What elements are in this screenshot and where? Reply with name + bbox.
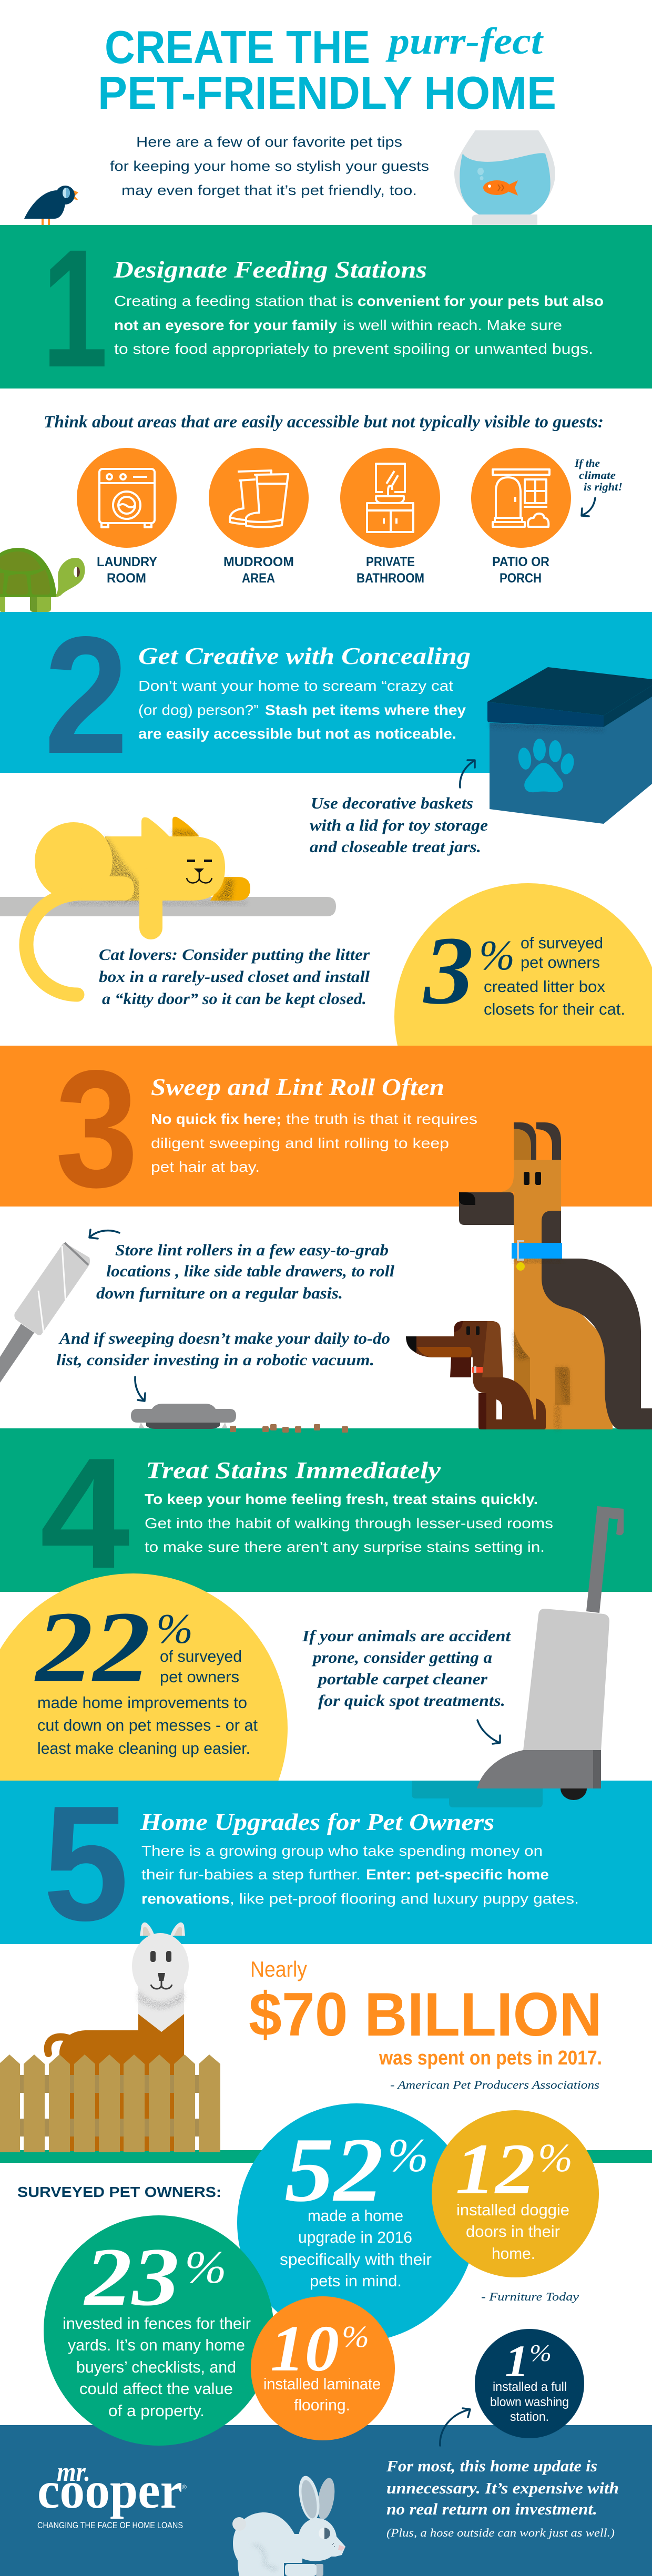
- stat circle: 23 percent: buyers’ checklists, and: [76, 2358, 236, 2376]
- stat circle: 52 percent: specifically with their: [280, 2250, 432, 2268]
- stat circle: 22 percent: least make cleaning up easier.: [37, 1739, 250, 1757]
- stat circle: 22 percent: pet owners: [160, 1668, 239, 1686]
- tip: carpet cleaner: prone, consider getting a: [311, 1648, 492, 1667]
- dog collar: [512, 1243, 562, 1259]
- arrow: to lint roller: [89, 1230, 119, 1239]
- stat circle: 1 percent: installed a full: [493, 2380, 567, 2394]
- source: furniture today: - Furniture Today: [481, 2290, 579, 2303]
- stat circle: 23 percent: could affect the value: [79, 2379, 233, 2398]
- label: mudroom area: MUDROOM: [223, 555, 294, 569]
- icon: rabbit: [232, 2474, 345, 2576]
- section 1 body text: is well within reach. Make sure: [343, 317, 562, 333]
- section 2 body text: (or dog) person?”: [138, 702, 259, 718]
- number 1: 1: [42, 214, 108, 402]
- icon: cat on shelf: [0, 817, 336, 995]
- note: if the climate is right: If the: [574, 457, 600, 469]
- stat circle: 12 percent: %: [538, 2136, 573, 2180]
- label: private bathroom: PRIVATE: [366, 555, 415, 569]
- section 5 body text: [141, 1843, 579, 1907]
- tip: decorative baskets: Use decorative baskets: [311, 794, 473, 812]
- tip: robotic vacuum: And if sweeping doesn’t make your daily to-do: [58, 1329, 390, 1347]
- number 4: 4: [40, 1425, 131, 1601]
- tip: robotic vacuum: list, consider investing in a robotic vacuum.: [56, 1351, 374, 1369]
- section 5 body text: There is a growing group who take spending money on: [141, 1843, 543, 1859]
- logo: mr. cooper: cooper: [37, 2461, 182, 2519]
- panel: section 5 home upgrades: [0, 1772, 652, 1955]
- icon: robot vacuum: [131, 1404, 236, 1429]
- icon: picket fence: [0, 2054, 220, 2152]
- stat circle: 52 percent: 52: [284, 2119, 383, 2221]
- panel: section 2 concealing: [0, 602, 652, 789]
- section 3 heading: Sweep and Lint Roll Often: [151, 1074, 444, 1100]
- section 4 body text: to make sure there aren’t any surprise stains setting in.: [145, 1539, 545, 1555]
- section 5 body text: , like pet-proof flooring and luxury puppy gates.: [230, 1890, 579, 1907]
- label: private bathroom: [356, 555, 424, 586]
- section 5 heading: Home Upgrades for Pet Owners: [140, 1808, 494, 1835]
- icon: bird: [24, 186, 78, 225]
- tip: lint rollers: down furniture on a regular basis.: [96, 1284, 343, 1302]
- tip: carpet cleaner: [302, 1627, 512, 1710]
- tip: robotic vacuum: [56, 1329, 390, 1369]
- logo: mr. cooper: CHANGING THE FACE OF HOME LOANS: [37, 2520, 183, 2530]
- label: patio or porch: PORCH: [500, 571, 542, 586]
- title: CREATE THE: [105, 21, 370, 73]
- intro text: for keeping your home so stylish your guests: [110, 158, 429, 174]
- label: private bathroom: BATHROOM: [356, 571, 424, 586]
- icon: mudroom circle: [209, 448, 309, 548]
- section 1 body text: Creating a feeding station that is: [114, 293, 353, 309]
- section 1 body text: not an eyesore for your family: [114, 317, 337, 333]
- panel: section 3 sweep and lint roll: [0, 1036, 652, 1222]
- vacuum shadow: [412, 1781, 543, 1807]
- shelf: [0, 897, 336, 916]
- subheading: areas: Think about areas that are easily accessible but not typically visible to guests:: [44, 413, 604, 432]
- section 4 body text: To keep your home feeling fresh, treat stains quickly.: [145, 1491, 538, 1507]
- stat circle: 52 percent: %: [388, 2130, 429, 2182]
- note: if the climate is right: climate: [579, 469, 616, 482]
- stat circle: 12 percent: 12: [455, 2129, 535, 2209]
- panel: section 1 feeding stations: [0, 214, 652, 402]
- stat circle: 1 percent: [475, 2329, 584, 2438]
- tip: cat lovers: a “kitty door” so it can be kept closed.: [102, 989, 366, 1008]
- stat circle: 10 percent: [251, 2296, 395, 2440]
- icon: storage box with paw: [487, 667, 652, 824]
- stat circle: 3 percent: created litter box: [484, 977, 606, 996]
- icon: white dog behind fence: [48, 1923, 189, 2151]
- section 2 body text: Don’t want your home to scream “crazy cat: [138, 678, 453, 694]
- stat circle: 10 percent: flooring.: [294, 2396, 350, 2414]
- number 3: 3: [55, 1036, 138, 1222]
- footer band: [0, 2425, 652, 2576]
- stat circle: 12 percent: [432, 2110, 599, 2277]
- note: home update unnecessary: no real return on investment.: [386, 2500, 597, 2518]
- stat circle: 23 percent: invested in fences for their: [63, 2314, 251, 2333]
- section 4 body text: Get into the habit of walking through lesser-used rooms: [145, 1515, 553, 1531]
- section 2 heading: Get Creative with Concealing: [138, 642, 471, 669]
- icon: private bathroom circle: [340, 448, 440, 548]
- section 5 body text: renovations: [141, 1890, 230, 1907]
- section 1 body text: [114, 293, 604, 357]
- stat circle: 52 percent: made a home: [308, 2206, 403, 2225]
- stat circle: 12 percent: doors in their: [466, 2222, 560, 2241]
- title: PET-FRIENDLY HOME: [98, 67, 556, 119]
- stat circle: 22 percent: of surveyed: [160, 1647, 242, 1665]
- section 1 body text: to store food appropriately to prevent spoiling or unwanted bugs.: [114, 341, 593, 357]
- icon: small brown dog: [406, 1321, 546, 1429]
- section 5 body text: their fur-babies a step further.: [141, 1866, 361, 1883]
- icon: large german shepherd: [459, 1122, 652, 1429]
- tip: lint rollers: Store lint rollers in a few easy-to-grab: [115, 1241, 389, 1259]
- tip: carpet cleaner: If your animals are accident: [302, 1627, 512, 1645]
- source: american pet producers: - American Pet Producers Associations: [390, 2078, 599, 2091]
- stat circle: 23 percent: [44, 2215, 274, 2446]
- tip: cat lovers: [99, 945, 370, 1008]
- green divider bar: [0, 2150, 652, 2163]
- stat circle: 1 percent: station.: [510, 2410, 549, 2424]
- intro text: Here are a few of our favorite pet tips: [136, 134, 402, 150]
- section 2 body text: [138, 678, 466, 742]
- stat circle: 10 percent: 10: [270, 2313, 339, 2385]
- tip: cat lovers: box in a rarely-used closet and install: [99, 967, 370, 986]
- stat circle: 52 percent: upgrade in 2016: [298, 2228, 412, 2246]
- stat circle: 22 percent: cut down on pet messes - or at: [37, 1716, 258, 1734]
- crumbs: [230, 1424, 348, 1433]
- note: home update unnecessary: (Plus, a hose outside can work just as well.): [386, 2526, 615, 2539]
- heading: surveyed pet owners: SURVEYED PET OWNERS:: [17, 2184, 221, 2200]
- stat circle: 22 percent: %: [156, 1606, 193, 1652]
- note: if the climate is right: is right!: [584, 481, 623, 493]
- icon: lint roller: [0, 1243, 90, 1383]
- section 1 body text: convenient for your pets but also: [358, 293, 604, 309]
- icon: turtle: [0, 548, 85, 612]
- stat circle: 23 percent: of a property.: [108, 2401, 205, 2420]
- arrow: to washing station: [440, 2408, 470, 2446]
- logo: mr. cooper: ®: [182, 2483, 187, 2491]
- section 3 body text: the truth is that it requires: [286, 1111, 477, 1127]
- section 3 body text: pet hair at bay.: [151, 1159, 260, 1175]
- stat circle: 52 percent: pets in mind.: [310, 2272, 402, 2290]
- stat circle: 3 percent: [394, 883, 652, 1150]
- arrow: [582, 498, 595, 516]
- arrow: to box: [460, 760, 475, 788]
- intro text: may even forget that it’s pet friendly, too.: [121, 182, 417, 198]
- stat: nearly 70 billion: [249, 1957, 602, 2069]
- tip: decorative baskets: and closeable treat jars.: [310, 837, 481, 856]
- label: patio or porch: PATIO OR: [492, 555, 549, 569]
- section 3 body text: [151, 1111, 477, 1175]
- stat circle: 22 percent: 22: [34, 1590, 150, 1703]
- note: home update unnecessary: For most, this home update is: [386, 2457, 597, 2475]
- stat circle: 23 percent: %: [185, 2242, 227, 2293]
- logo: mr. cooper: mr.: [57, 2457, 90, 2487]
- panel: section 4 treat stains: [0, 1425, 652, 1601]
- title: [98, 20, 556, 119]
- stat circle: 10 percent: installed laminate: [263, 2375, 381, 2393]
- section 2 body text: are easily accessible but not as noticeable.: [138, 725, 456, 742]
- label: laundry room: ROOM: [107, 571, 146, 586]
- icon: paw print: [517, 739, 576, 792]
- stat: nearly 70 billion: Nearly: [250, 1957, 307, 1981]
- stat circle: 52 percent: [237, 2103, 476, 2342]
- tip: carpet cleaner: for quick spot treatments.: [318, 1691, 505, 1710]
- tip: lint rollers: [96, 1241, 394, 1302]
- section 3 body text: diligent sweeping and lint rolling to keep: [151, 1135, 449, 1151]
- stat: nearly 70 billion: was spent on pets in 2017.: [379, 2047, 602, 2069]
- stat circle: 22 percent: [0, 1573, 288, 1883]
- stat circle: 1 percent: 1: [505, 2336, 529, 2386]
- arrow: to robot vacuum: [135, 1377, 145, 1401]
- stat circle: 23 percent: 23: [84, 2231, 179, 2323]
- number 5: 5: [43, 1772, 129, 1955]
- note: if the climate is right: [574, 457, 623, 516]
- section 3 body text: No quick fix here;: [151, 1111, 281, 1127]
- icon: patio or porch circle: [471, 448, 571, 548]
- icon: carpet cleaner vacuum: [477, 1506, 624, 1800]
- stat circle: 1 percent: blown washing: [490, 2395, 569, 2409]
- label: laundry room: LAUNDRY: [97, 555, 157, 569]
- stat circle: 1 percent: %: [529, 2339, 552, 2366]
- title: purr-fect: [385, 20, 544, 62]
- tip: carpet cleaner: portable carpet cleaner: [317, 1670, 488, 1688]
- tip: lint rollers: locations , like side table drawers, to roll: [106, 1262, 394, 1280]
- stat circle: 23 percent: yards. It’s on many home: [68, 2336, 245, 2354]
- tip: cat lovers: Cat lovers: Consider putting the litter: [99, 945, 370, 964]
- label: mudroom area: [223, 555, 294, 586]
- arrow: to carpet cleaner: [477, 1720, 500, 1744]
- label: patio or porch: [492, 555, 549, 586]
- tip: decorative baskets: [310, 794, 488, 856]
- icon: laundry room circle: [77, 448, 177, 548]
- stat circle: 3 percent: %: [479, 933, 515, 979]
- icon: goldfish: [483, 180, 518, 196]
- stat circle: 10 percent: %: [342, 2319, 369, 2354]
- stat: nearly 70 billion: $70 BILLION: [249, 1980, 602, 2049]
- stat circle: 22 percent: made home improvements to: [37, 1693, 247, 1712]
- stat circle: 3 percent: of surveyed: [521, 934, 603, 952]
- intro text: [110, 134, 429, 198]
- section 2 body text: Stash pet items where they: [265, 702, 466, 718]
- tip: decorative baskets: with a lid for toy storage: [310, 816, 488, 834]
- stat circle: 3 percent: closets for their cat.: [484, 1000, 625, 1018]
- label: mudroom area: AREA: [242, 571, 275, 586]
- stat circle: 12 percent: installed doggie: [456, 2201, 569, 2219]
- number 2: 2: [44, 602, 128, 789]
- note: home update unnecessary: unnecessary. It’s expensive with: [386, 2479, 619, 2497]
- label: laundry room: [97, 555, 157, 586]
- stat circle: 3 percent: 3: [423, 917, 474, 1025]
- section 1 heading: Designate Feeding Stations: [113, 256, 427, 283]
- section 4 body text: [145, 1491, 553, 1555]
- note: home update unnecessary: [386, 2457, 619, 2539]
- stat circle: 12 percent: home.: [492, 2244, 535, 2263]
- stat circle: 3 percent: pet owners: [521, 953, 600, 972]
- section 4 heading: Treat Stains Immediately: [146, 1457, 441, 1484]
- section 5 body text: Enter: pet-specific home: [366, 1866, 549, 1883]
- icon: fishbowl: [454, 130, 555, 225]
